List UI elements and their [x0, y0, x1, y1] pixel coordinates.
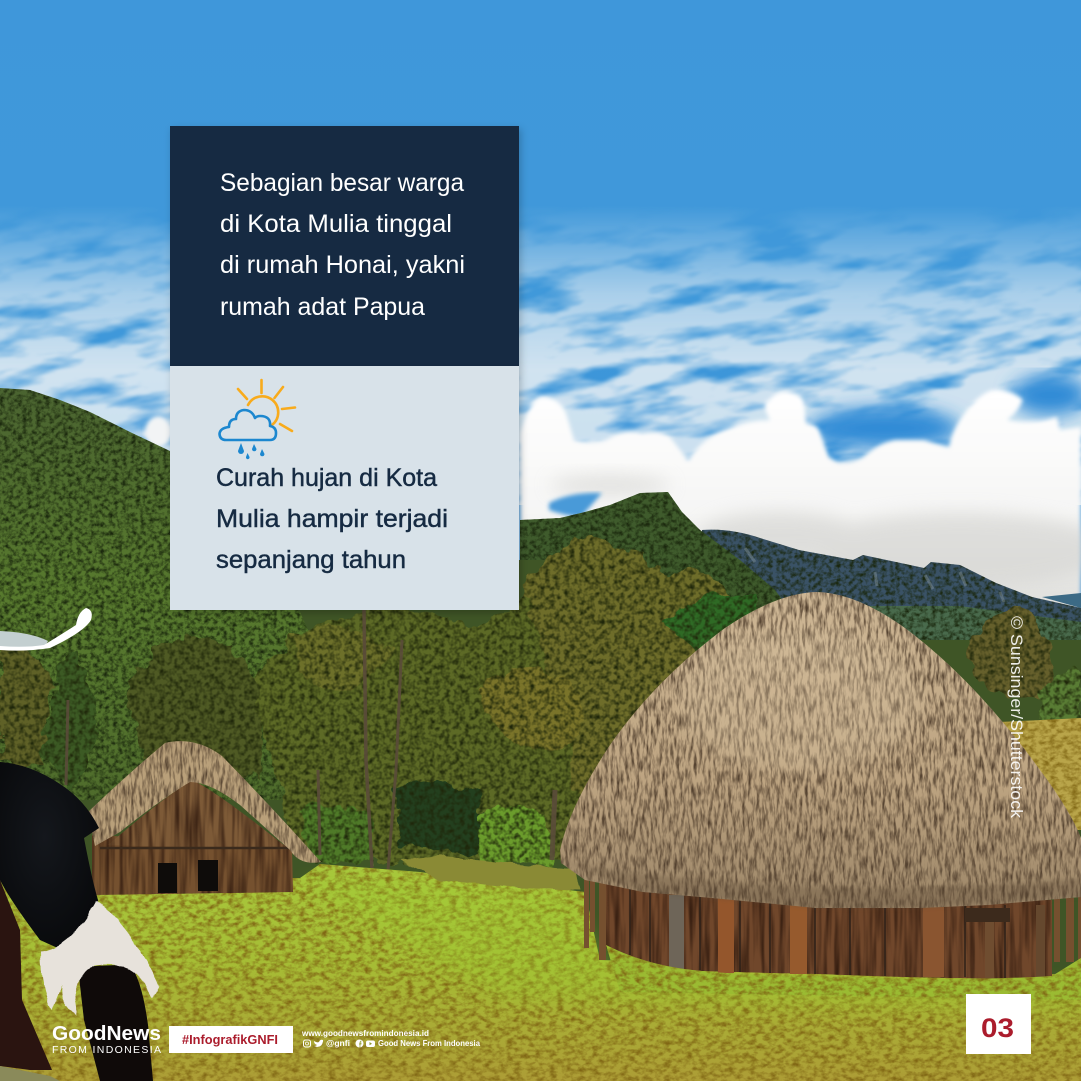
honai back posts	[584, 878, 1081, 962]
right sun-lit field	[1000, 718, 1081, 830]
small hut roof	[88, 741, 321, 863]
forest base layer	[0, 560, 1081, 1010]
treeline	[0, 535, 1081, 860]
headline text	[220, 169, 465, 321]
white feather tip	[0, 608, 92, 651]
horse black feathered body	[0, 762, 99, 950]
headline text: di rumah Honai, yakni	[220, 251, 465, 279]
small hut doors	[158, 863, 177, 893]
icon: instagram	[304, 1040, 310, 1047]
rainfall text: Mulia hampir terjadi	[216, 505, 448, 533]
patch of sky under the cloud	[549, 493, 602, 517]
sky	[0, 0, 1081, 640]
logo: GoodNews from Indonesia: FROM INDONESIA	[52, 1044, 161, 1056]
icon: youtube	[366, 1040, 375, 1047]
meadow	[0, 864, 1081, 1081]
far ridge rock streaks	[745, 548, 1004, 602]
rainfall text: Curah hujan di Kota	[216, 464, 437, 492]
panel: headline	[170, 126, 519, 366]
grass at hut base	[606, 945, 1081, 1000]
small hut beam	[100, 847, 292, 849]
horse leg right	[78, 965, 153, 1081]
peak mountain	[520, 492, 790, 700]
green mid slope behind honai	[860, 606, 1081, 740]
white feathers	[40, 900, 159, 1016]
clear sky pockets above cumulus	[810, 375, 1081, 448]
logo: GoodNews from Indonesia	[52, 1022, 161, 1056]
honai wall planks	[630, 885, 1045, 980]
cloud shading	[550, 475, 1081, 588]
photo credit: © Sunsinger/Shutterstock	[1007, 616, 1026, 819]
saddle strap	[0, 1066, 60, 1081]
tree trunks	[66, 610, 555, 870]
icon: twitter	[314, 1040, 323, 1047]
small hut walls	[92, 835, 293, 895]
small hut gable	[108, 780, 290, 850]
icon: facebook	[356, 1040, 364, 1048]
understory: dark forest floor with bright shrubs	[300, 781, 552, 865]
honai roof highlight	[680, 630, 920, 770]
social media and website info: @gnfi	[326, 1039, 350, 1048]
hashtag badge: #InfografikGNFI	[182, 1033, 278, 1047]
yellow shrubs	[400, 856, 580, 890]
cumulus clouds	[145, 390, 1081, 610]
horse leg left	[0, 880, 52, 1070]
social media and website info: Good News From Indonesia	[378, 1039, 481, 1048]
cirrus clouds	[0, 212, 1081, 505]
horse silhouette	[0, 762, 159, 1081]
far rocky ridge	[700, 530, 1081, 700]
page number: 03	[981, 1013, 1014, 1043]
headline text: di Kota Mulia tinggal	[220, 210, 452, 238]
left cloud remnant	[145, 416, 171, 448]
hashtag badge	[169, 1026, 293, 1053]
headline text: Sebagian besar warga	[220, 169, 464, 197]
social media and website info: www.goodnewsfromindonesia.id	[301, 1029, 429, 1038]
large Honai hut	[560, 592, 1081, 980]
honai roof fringe shade	[565, 862, 1081, 908]
social media and website info	[301, 1029, 481, 1048]
logo: GoodNews from Indonesia: GoodNews	[52, 1022, 161, 1045]
icon: sun behind rain cloud	[220, 380, 295, 459]
page number	[966, 994, 1031, 1054]
left forested hill	[0, 388, 330, 800]
pale distant band	[1042, 593, 1081, 608]
rainfall text: sepanjang tahun	[216, 546, 406, 574]
honai roof	[560, 592, 1081, 908]
small hut	[88, 741, 321, 895]
panel: rainfall	[170, 366, 519, 610]
rainfall text	[216, 464, 448, 574]
headline text: rumah adat Papua	[220, 293, 425, 321]
honai walls	[606, 880, 1052, 978]
bright meadow band	[300, 880, 1081, 1010]
